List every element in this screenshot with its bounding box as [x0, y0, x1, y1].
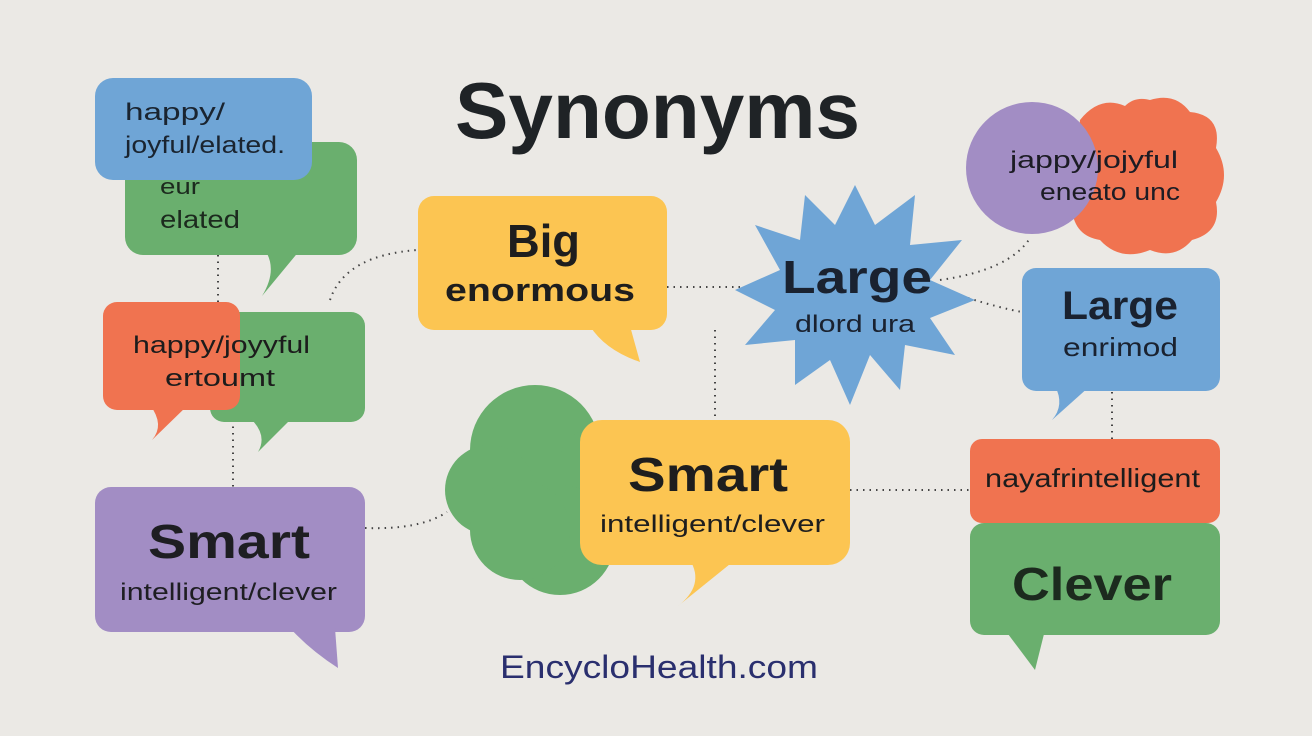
bubble: green behind orange — [210, 312, 365, 452]
bubble: orange intelligent — [970, 439, 1220, 523]
starburst: Large — [735, 185, 975, 405]
bubble: blue Large: Large — [1062, 284, 1178, 328]
starburst: Large: dlord ura — [795, 311, 916, 338]
bubble: yellow Big — [418, 196, 667, 362]
bubble: blue Large: enrimod — [1063, 332, 1178, 362]
bubble: yellow Smart: Smart — [628, 449, 788, 502]
bubble: yellow Smart — [580, 420, 850, 606]
bubble: green elated: elated — [160, 206, 240, 234]
footer: EncycloHealth.com — [500, 649, 818, 685]
bubble: purple Smart: intelligent/clever — [120, 579, 337, 606]
bubble: blue happy: joyful/elated. — [124, 132, 285, 159]
starburst: Large: Large — [782, 251, 932, 303]
blob: orange — [1072, 98, 1224, 254]
bubble: orange happy/joyyful: happy/joyyful — [133, 332, 310, 359]
bubble: blue happy: happy/ — [125, 99, 225, 126]
bubble: orange intelligent: nayafrintelligent — [985, 463, 1201, 493]
bubble: green elated — [125, 142, 357, 296]
cloud: green — [445, 385, 620, 595]
circle: purple: jappy/jojyful — [1009, 147, 1178, 174]
circle: purple — [966, 102, 1180, 234]
bubble: blue happy — [95, 78, 312, 180]
bubble: orange happy/joyyful: ertoumt — [165, 365, 275, 392]
circle: purple: eneato unc — [1040, 179, 1180, 206]
bubble: purple Smart: Smart — [148, 516, 310, 569]
bubble: purple Smart — [95, 487, 365, 668]
bubble: orange happy/joyyful — [103, 302, 310, 440]
bubble: yellow Big: enormous — [445, 272, 635, 308]
bubble: green Clever — [970, 523, 1220, 670]
title: Synonyms — [455, 66, 860, 155]
bubble: green elated: eur — [160, 174, 200, 199]
bubble: green Clever: Clever — [1012, 558, 1172, 610]
bubble: yellow Big: Big — [507, 215, 580, 267]
bubble: yellow Smart: intelligent/clever — [600, 511, 825, 538]
bubble: blue Large — [1022, 268, 1220, 420]
